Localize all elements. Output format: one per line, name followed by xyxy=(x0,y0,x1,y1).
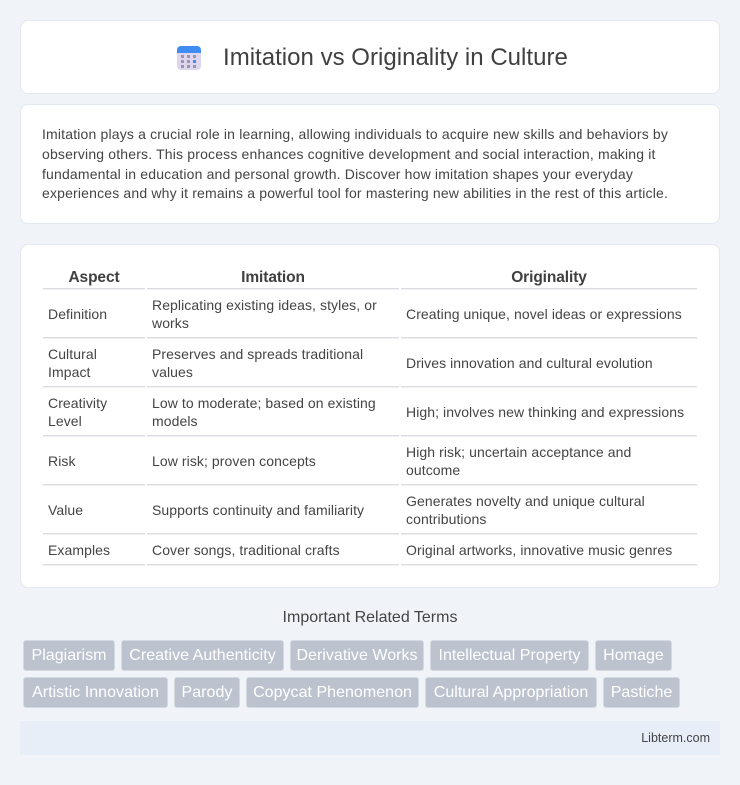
tag: Plagiarism: Plagiarism xyxy=(32,647,106,664)
tag: Derivative Works xyxy=(290,640,424,671)
row: Risk: outcome xyxy=(406,462,460,478)
row: Risk: Low risk; proven concepts xyxy=(152,453,316,469)
row: Cultural Impact: Drives innovation and cultural evolution xyxy=(406,355,653,371)
tag: Creative Authenticity: Creative Authenticity xyxy=(129,647,276,664)
text block: introduction: Imitation plays a crucial role in learning, allowing individuals to acquire new skills and behaviors by xyxy=(42,126,668,142)
row: Value: Value xyxy=(48,502,83,518)
row: Creativity Level: High; involves new thinking and expressions xyxy=(406,404,684,420)
row: Examples: Examples xyxy=(48,542,110,558)
row: Examples: Original artworks, innovative music genres xyxy=(406,542,672,558)
tag: Artistic Innovation xyxy=(23,677,168,708)
row: Cultural Impact: Impact xyxy=(48,364,90,380)
tag: Copycat Phenomenon: Copycat Phenomenon xyxy=(253,684,412,701)
text block: introduction xyxy=(42,126,668,201)
panel: introduction xyxy=(20,104,720,224)
table header xyxy=(68,269,587,286)
tag: Parody xyxy=(174,677,240,708)
row: Definition xyxy=(48,297,682,331)
text block: introduction: experiences and why it remains a powerful tool for mastering new abilities in the rest of this article. xyxy=(42,185,668,201)
text block: introduction: observing others. This process enhances cognitive development and social interaction, making it xyxy=(42,146,656,162)
tag: Homage xyxy=(595,640,672,671)
related term tags xyxy=(23,640,680,708)
tag: Cultural Appropriation xyxy=(425,677,597,708)
row: Creativity Level: models xyxy=(152,413,198,429)
row: Cultural Impact xyxy=(48,346,653,380)
row: Value: Supports continuity and familiarity xyxy=(152,502,364,518)
tag: Homage: Homage xyxy=(603,647,664,664)
row: Value: contributions xyxy=(406,511,486,527)
footer bar xyxy=(20,721,720,755)
row: Creativity Level: Level xyxy=(48,413,82,429)
table header: Imitation xyxy=(241,269,305,286)
row: Value: Generates novelty and unique cultural xyxy=(406,493,645,509)
text block: introduction: fundamental in education and personal growth. Discover how imitation shapes your everyday xyxy=(42,166,633,182)
row: Cultural Impact: values xyxy=(152,364,193,380)
comparison table xyxy=(43,269,697,566)
table header: Originality xyxy=(511,269,587,286)
heading: related terms: Important Related Terms xyxy=(283,609,457,626)
tag: Pastiche xyxy=(603,677,680,708)
title: Imitation vs Originality in Culture xyxy=(223,44,568,71)
tag: Plagiarism xyxy=(23,640,115,671)
row: Examples: Cover songs, traditional crafts xyxy=(152,542,340,558)
panel: title header xyxy=(20,20,720,94)
icon: calendar grid xyxy=(177,46,201,70)
row: Value xyxy=(48,493,645,527)
row: Definition: works xyxy=(152,315,189,331)
tag: Intellectual Property: Intellectual Property xyxy=(438,647,581,664)
tag: Intellectual Property xyxy=(430,640,589,671)
tag: Derivative Works: Derivative Works xyxy=(296,647,418,664)
row: Examples xyxy=(48,542,672,558)
tag: Cultural Appropriation: Cultural Appropriation xyxy=(434,684,588,701)
row: Definition: Replicating existing ideas, styles, or xyxy=(152,297,377,313)
row: Cultural Impact: Cultural xyxy=(48,346,97,362)
row: Creativity Level: Creativity xyxy=(48,395,107,411)
row: Risk: High risk; uncertain acceptance and xyxy=(406,444,631,460)
row: Cultural Impact: Preserves and spreads traditional xyxy=(152,346,363,362)
row: Risk: Risk xyxy=(48,453,76,469)
table header: Aspect xyxy=(68,269,120,286)
row: Definition: Definition xyxy=(48,306,107,322)
tag: Pastiche: Pastiche xyxy=(611,684,672,701)
row: Definition: Creating unique, novel ideas or expressions xyxy=(406,306,682,322)
footer credit: Libterm.com xyxy=(641,731,710,745)
row: Risk xyxy=(48,444,631,478)
panel: comparison table xyxy=(20,244,720,588)
tag: Copycat Phenomenon xyxy=(246,677,419,708)
tag: Parody: Parody xyxy=(182,684,232,701)
tag: Creative Authenticity xyxy=(121,640,284,671)
tag: Artistic Innovation: Artistic Innovation xyxy=(32,684,159,701)
row: Creativity Level xyxy=(48,395,684,429)
row: Creativity Level: Low to moderate; based on existing xyxy=(152,395,376,411)
